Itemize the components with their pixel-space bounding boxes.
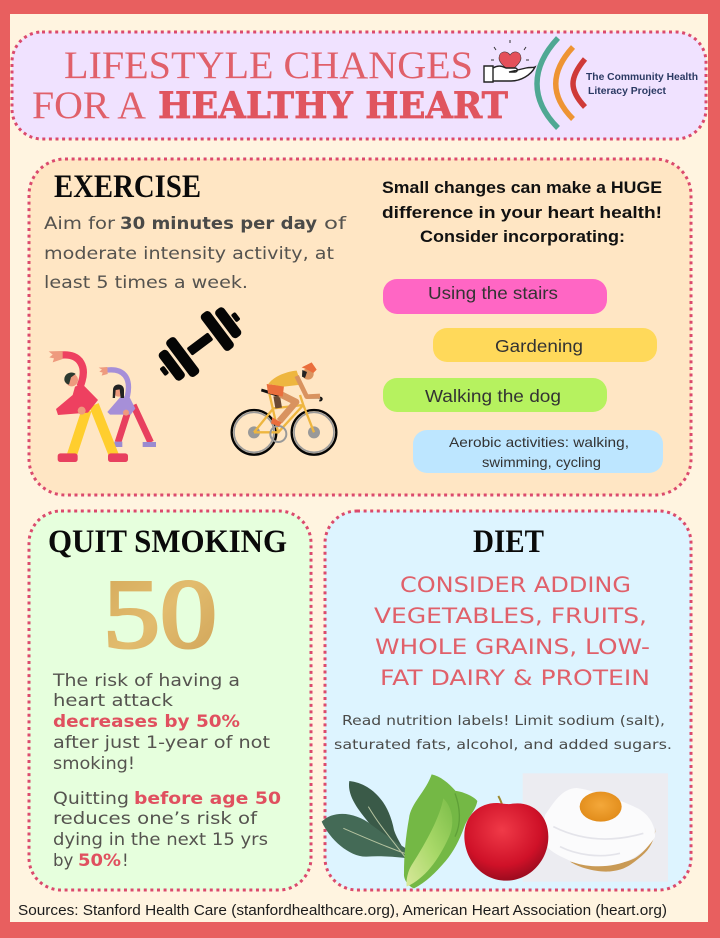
text: foods to add: VEGETABLES, FRUITS, — [374, 604, 647, 628]
text: nutrition labels — [334, 714, 672, 753]
text: foods to add: CONSIDER ADDING — [400, 573, 631, 597]
pill: aerobic activities: swimming, cycling — [482, 454, 601, 470]
panel: quit smoking — [29, 511, 311, 890]
text: small changes intro: difference in your heart health! — [382, 203, 662, 222]
title — [32, 44, 508, 127]
pill: aerobic activities: Aerobic activities: walking, — [449, 434, 629, 450]
title: LIFESTYLE CHANGES — [64, 44, 473, 87]
text: small changes intro — [382, 178, 662, 246]
text: risk of heart attack: heart attack — [53, 691, 173, 710]
logo: The Community Health Literacy Project — [537, 38, 698, 128]
icon: people stretching — [49, 351, 156, 462]
pill: gardening: Gardening — [495, 336, 583, 356]
text: foods to add: WHOLE GRAINS, LOW- — [375, 635, 650, 659]
text: risk of heart attack — [52, 671, 271, 773]
text: quitting before age 50: by — [53, 851, 74, 870]
panel: exercise — [29, 159, 691, 495]
title: FOR A — [32, 84, 146, 127]
heading: quit smoking: QUIT SMOKING — [48, 524, 287, 560]
pill: gardening — [433, 328, 657, 362]
text: sources: Sources: Stanford Health Care (stanfordhealthcare.org), American Heart Association (heart.org) — [18, 903, 667, 919]
heading: diet: DIET — [473, 524, 544, 560]
text: small changes intro: Small changes can make a HUGE — [382, 178, 662, 197]
big number 50: 50 — [103, 560, 217, 669]
text: nutrition labels: saturated fats, alcohol, and added sugars. — [334, 738, 672, 753]
text: quitting before age 50: reduces one’s risk of — [53, 809, 258, 828]
image: red apple — [464, 796, 548, 881]
text: nutrition labels: Read nutrition labels! Limit sodium (salt), — [342, 714, 665, 729]
text: small changes intro: Consider incorporating: — [420, 227, 625, 246]
text: quitting before age 50: Quitting — [53, 789, 129, 808]
pill: walking the dog — [383, 378, 607, 412]
text: risk of heart attack: The risk of having a — [52, 671, 240, 690]
text: quitting before age 50: 50% — [78, 850, 121, 870]
text: foods to add — [374, 573, 650, 690]
icon: heart in hand — [484, 40, 535, 82]
heading: exercise: EXERCISE — [54, 169, 201, 205]
text: exercise goal: moderate intensity activity, at — [44, 244, 335, 263]
logo: The Community Health Literacy Project: The Community Health — [586, 71, 698, 83]
pill: walking the dog: Walking the dog — [425, 386, 561, 406]
icon: cyclist — [232, 362, 336, 455]
panel: title banner — [12, 32, 706, 139]
text: risk of heart attack: smoking! — [53, 754, 135, 773]
pill: using the stairs: Using the stairs — [428, 283, 558, 303]
text: risk of heart attack: after just 1-year of not — [53, 733, 271, 752]
title: HEALTHY HEART — [158, 85, 508, 127]
text: exercise goal: 30 minutes per day — [120, 214, 317, 233]
image: kale leaves — [322, 781, 427, 870]
text: exercise goal — [44, 214, 348, 292]
text: exercise goal: of — [324, 214, 348, 233]
image: romaine lettuce — [404, 774, 477, 888]
text: quitting before age 50 — [53, 788, 281, 870]
icon: dumbbell — [149, 297, 251, 391]
panel: diet — [322, 511, 691, 890]
text: quitting before age 50: dying in the next 15 yrs — [53, 830, 268, 849]
pill: aerobic activities — [413, 430, 663, 473]
text: exercise goal: least 5 times a week. — [44, 273, 248, 292]
text: quitting before age 50: ! — [122, 851, 129, 870]
text: foods to add: FAT DAIRY & PROTEIN — [380, 666, 650, 690]
image: fried egg — [523, 773, 668, 882]
pill: using the stairs — [383, 279, 607, 314]
text: risk of heart attack: decreases by 50% — [53, 711, 240, 731]
text: exercise goal: Aim for — [44, 214, 115, 233]
logo: The Community Health Literacy Project: Literacy Project — [588, 85, 666, 97]
text: quitting before age 50: before age 50 — [134, 788, 281, 808]
